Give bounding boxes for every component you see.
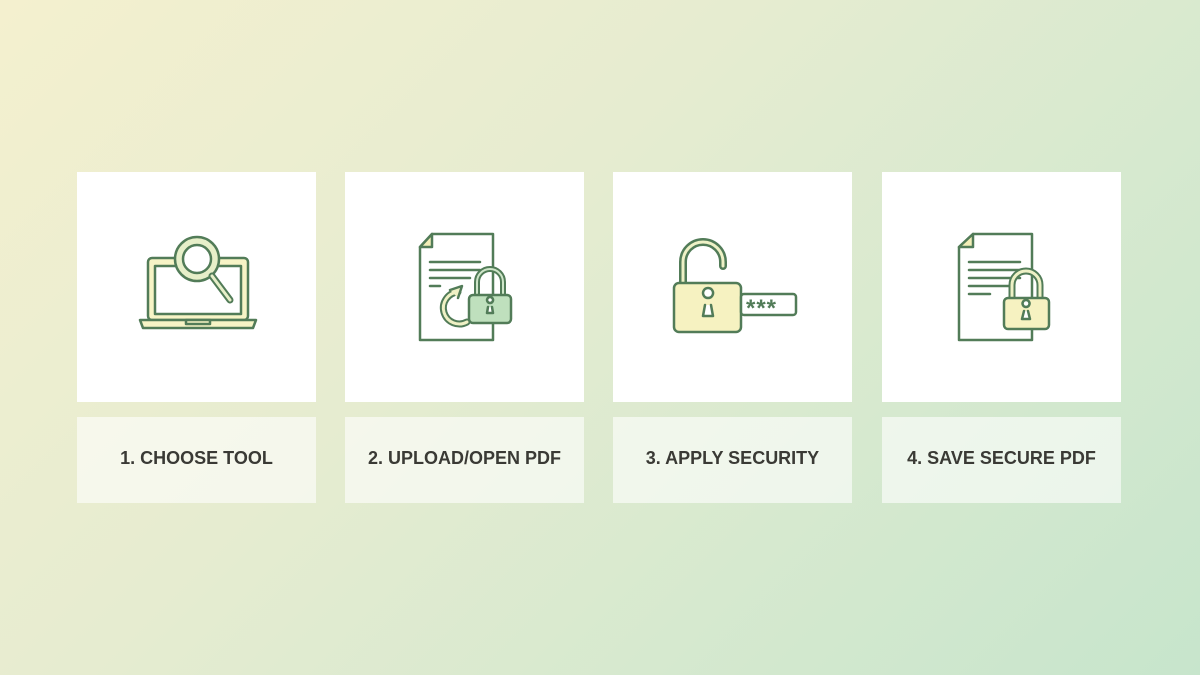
card 3: apply security: [613, 172, 852, 402]
card 2: upload/open pdf: [345, 172, 584, 402]
label 1: 1. CHOOSE TOOL: [120, 448, 273, 468]
icon: open padlock with password: [674, 242, 796, 332]
icon: laptop with magnifier: [140, 237, 256, 328]
icon: document with locked padlock: [959, 234, 1049, 340]
icon: open padlock with password: ***: [746, 295, 777, 322]
label 3: 3. APPLY SECURITY: [646, 448, 819, 468]
card 1: choose tool: [77, 172, 316, 402]
label 2: 2. UPLOAD/OPEN PDF: [368, 448, 561, 468]
label 4: [882, 417, 1121, 503]
icon: document with refresh arrow and lock: [420, 234, 511, 340]
card 4: save secure pdf: [882, 172, 1121, 402]
label 1: [77, 417, 316, 503]
label 3: [613, 417, 852, 503]
label 4: 4. SAVE SECURE PDF: [907, 448, 1096, 468]
label 2: [345, 417, 584, 503]
